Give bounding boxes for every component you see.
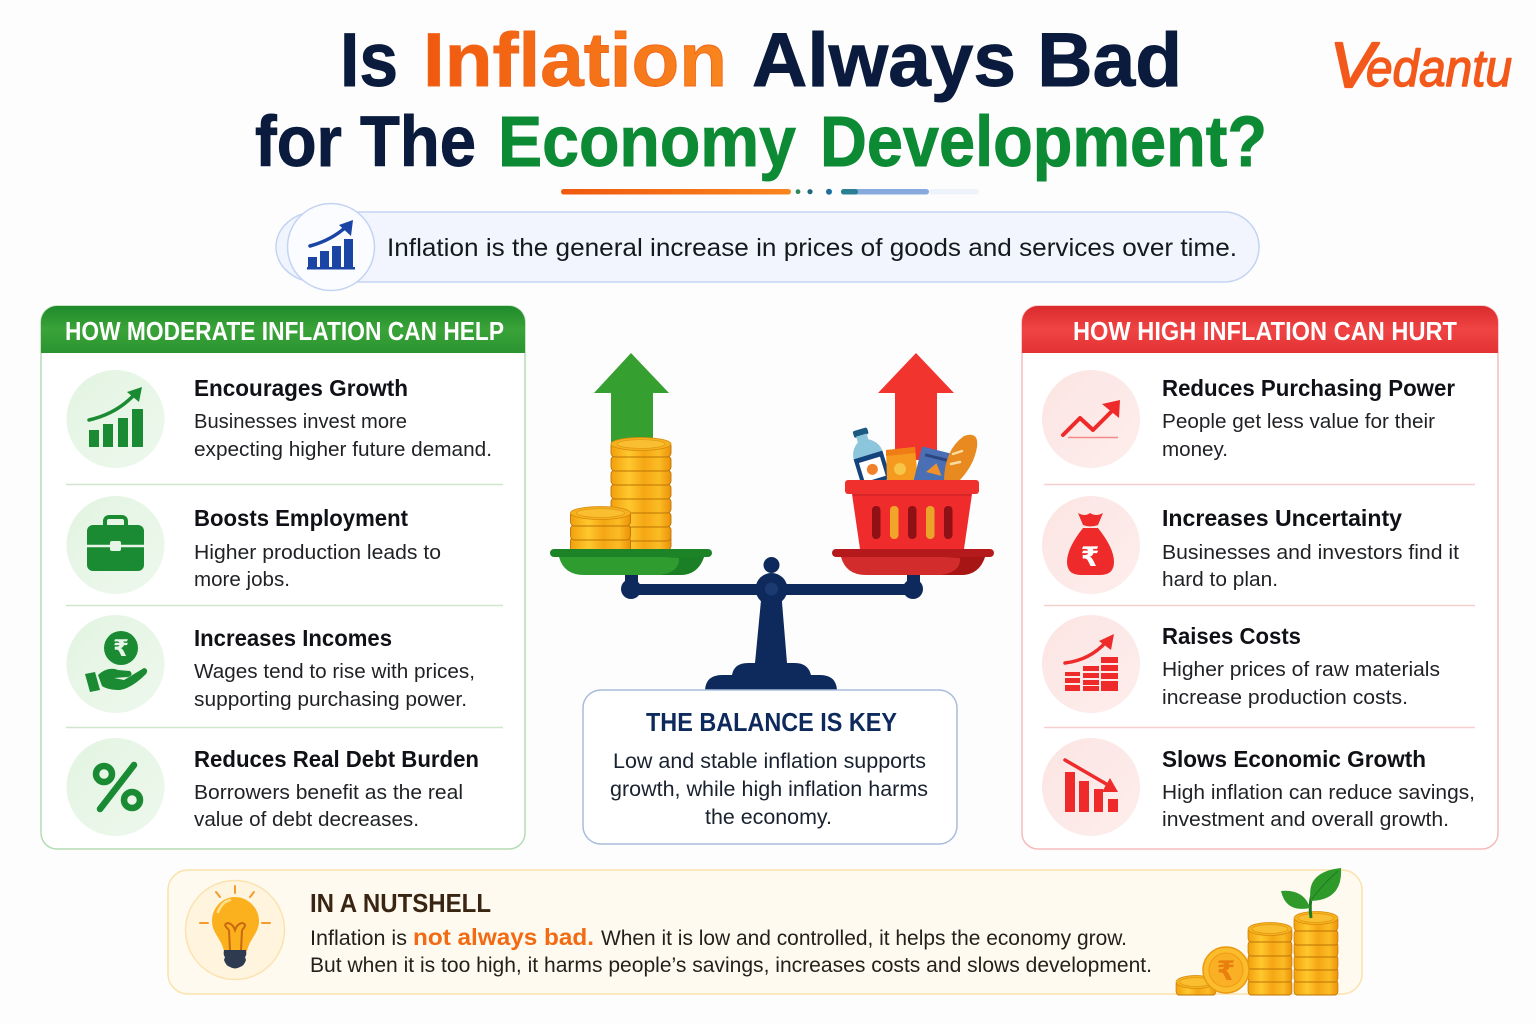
item: slows economic growth bbox=[1042, 738, 1475, 836]
title bbox=[255, 18, 1267, 182]
item: slows economic growth: High inflation can reduce savings, bbox=[1162, 781, 1475, 804]
red basket bbox=[845, 480, 979, 549]
item: reduces purchasing power bbox=[1042, 370, 1455, 468]
item: boosts employment: more jobs. bbox=[194, 568, 290, 591]
item: reduces purchasing power: Reduces Purchasing Power bbox=[1162, 375, 1455, 401]
title: Always Bad bbox=[752, 18, 1182, 103]
scale beam and stand bbox=[621, 557, 923, 690]
title: for The bbox=[255, 103, 476, 182]
item: reduces purchasing power: money. bbox=[1162, 438, 1228, 461]
icon: light bulb bbox=[186, 880, 284, 980]
panel header bbox=[1022, 306, 1498, 353]
green pan bbox=[550, 549, 712, 575]
item: increases incomes: ₹ bbox=[113, 635, 129, 661]
orange box bbox=[886, 447, 918, 482]
panel header bbox=[41, 306, 525, 353]
nutshell text: But when it is too high, it harms people’s savings, increases costs and slows development. bbox=[310, 954, 1152, 977]
callout: the balance is key: Low and stable inflation supports bbox=[613, 750, 926, 773]
bread loaf bbox=[944, 435, 977, 482]
item: encourages growth: Encourages Growth bbox=[194, 375, 408, 401]
item: reduces purchasing power: People get less value for their bbox=[1162, 410, 1435, 433]
item: slows economic growth: investment and overall growth. bbox=[1162, 808, 1449, 831]
nutshell heading: IN A NUTSHELL bbox=[310, 888, 491, 918]
item: increases uncertainty: Increases Uncertainty bbox=[1162, 505, 1402, 531]
title: Economy bbox=[498, 103, 796, 182]
item: encourages growth bbox=[66, 370, 492, 468]
item: reduces real debt burden: Reduces Real Debt Burden bbox=[194, 746, 479, 772]
item: raises costs: Higher prices of raw materials bbox=[1162, 658, 1440, 681]
item: increases incomes: Wages tend to rise with prices, bbox=[194, 660, 475, 683]
callout: the balance is key: the economy. bbox=[705, 806, 832, 829]
panel: how high inflation can hurt bbox=[1022, 306, 1498, 849]
panel: in a nutshell bbox=[168, 868, 1362, 995]
item: boosts employment bbox=[66, 496, 441, 594]
item: encourages growth: expecting higher future demand. bbox=[194, 438, 492, 461]
illustration: coins and sprout bbox=[1176, 868, 1341, 995]
icon: growth chart bbox=[288, 204, 374, 290]
illustration: balance scale bbox=[550, 353, 994, 690]
item: increases uncertainty bbox=[1042, 496, 1459, 594]
nutshell text bbox=[310, 924, 1152, 977]
item: increases uncertainty: ₹ bbox=[1081, 542, 1099, 572]
logo: Vedantu bbox=[1330, 29, 1512, 101]
item: reduces real debt burden: Borrowers benefit as the real bbox=[194, 781, 463, 804]
title: Is bbox=[340, 18, 398, 103]
item: increases incomes: supporting purchasing power. bbox=[194, 688, 467, 711]
callout: the balance is key: THE BALANCE IS KEY bbox=[646, 707, 897, 737]
logo: Vedantu: edantu bbox=[1366, 40, 1512, 98]
item: increases uncertainty: Businesses and investors find it bbox=[1162, 541, 1459, 564]
item: increases incomes: Increases Incomes bbox=[194, 625, 392, 651]
nutshell text: Inflation is bbox=[310, 927, 407, 950]
item: boosts employment: Higher production leads to bbox=[194, 541, 441, 564]
nutshell text: When it is low and controlled, it helps the economy grow. bbox=[601, 927, 1127, 950]
logo: Vedantu: V bbox=[1330, 29, 1379, 101]
item: reduces real debt burden bbox=[66, 738, 479, 836]
blue snack pack bbox=[913, 446, 955, 489]
item: slows economic growth: Slows Economic Growth bbox=[1162, 746, 1426, 772]
tall coin stack bbox=[611, 438, 671, 550]
item: reduces real debt burden: value of debt decreases. bbox=[194, 808, 419, 831]
callout: the balance is key: growth, while high inflation harms bbox=[610, 778, 928, 801]
item: encourages growth: Businesses invest more bbox=[194, 410, 407, 433]
title underline bbox=[561, 189, 979, 195]
item: increases incomes bbox=[66, 615, 475, 713]
panel header: HOW HIGH INFLATION CAN HURT bbox=[1073, 316, 1457, 346]
panel: how moderate inflation can help bbox=[41, 306, 525, 849]
nutshell text: not always bad. bbox=[413, 924, 594, 950]
bottle bbox=[846, 425, 891, 487]
arrow: green up bbox=[594, 353, 669, 445]
panel header: HOW MODERATE INFLATION CAN HELP bbox=[65, 316, 504, 346]
item: raises costs: increase production costs. bbox=[1162, 686, 1408, 709]
callout: the balance is key bbox=[583, 690, 957, 844]
item: boosts employment: Boosts Employment bbox=[194, 505, 408, 531]
red pan bbox=[832, 549, 994, 575]
definition text: Inflation is the general increase in prices of goods and services over time. bbox=[387, 234, 1237, 262]
arrow: red up bbox=[878, 353, 954, 460]
short coin stack bbox=[570, 506, 630, 552]
item: raises costs bbox=[1042, 615, 1440, 713]
item: increases uncertainty: hard to plan. bbox=[1162, 568, 1278, 591]
item: raises costs: Raises Costs bbox=[1162, 623, 1301, 649]
definition pill bbox=[276, 204, 1259, 290]
illustration: coins and sprout: ₹ bbox=[1217, 956, 1235, 986]
title: Development? bbox=[820, 103, 1267, 182]
title: Inflation bbox=[423, 18, 727, 103]
